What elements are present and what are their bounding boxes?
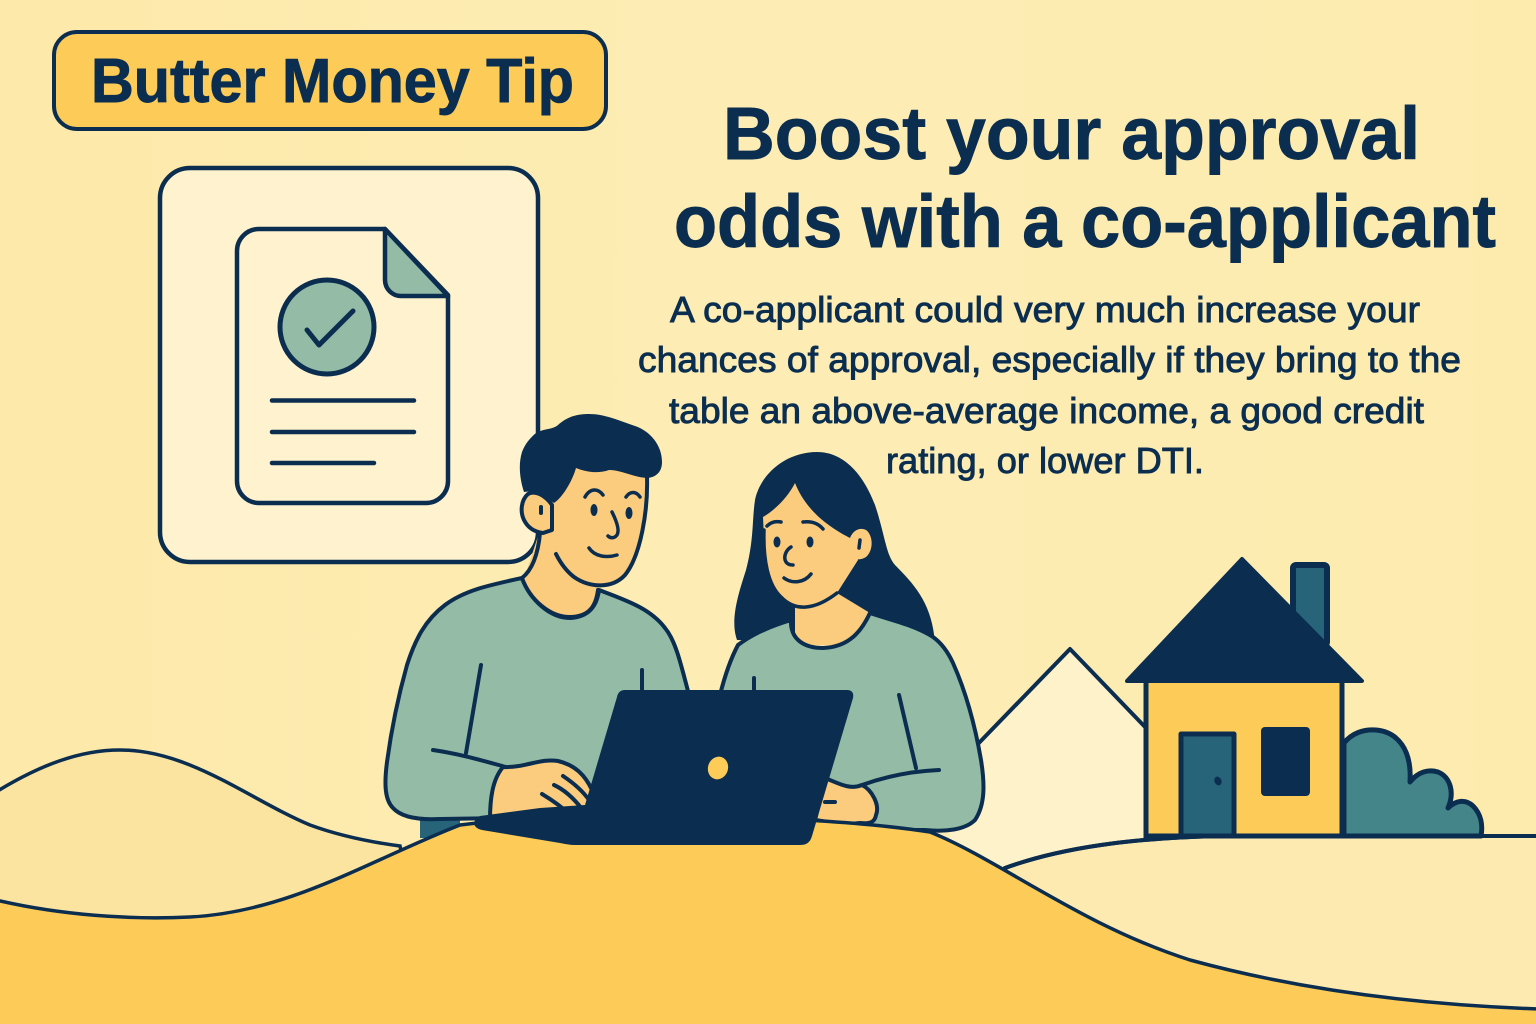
body text: table an above-average income, a good credit xyxy=(669,390,1424,431)
roof xyxy=(1127,559,1362,681)
document card xyxy=(160,168,538,562)
laptop xyxy=(474,690,853,845)
chimney xyxy=(1293,565,1327,645)
stool xyxy=(420,814,460,838)
man hair xyxy=(520,414,662,503)
woman face lines xyxy=(764,522,837,607)
title xyxy=(674,92,1496,263)
door knob xyxy=(1213,775,1223,787)
body text xyxy=(638,289,1461,481)
text lines xyxy=(272,400,414,463)
house wall xyxy=(1146,680,1342,836)
front hill xyxy=(0,816,1536,1024)
man face details xyxy=(585,490,640,557)
man sleeve lines xyxy=(433,665,642,767)
laptop logo xyxy=(705,754,731,782)
man sweater xyxy=(385,578,689,819)
man xyxy=(385,414,689,838)
right hill xyxy=(1005,836,1536,1024)
woman xyxy=(720,452,983,831)
man neck xyxy=(524,530,601,617)
woman ear xyxy=(850,529,872,559)
badge: Butter Money Tip: Butter Money Tip xyxy=(91,47,574,116)
woman neck xyxy=(795,593,870,645)
woman sweater xyxy=(720,613,983,831)
back hill left xyxy=(0,750,420,930)
bush xyxy=(1344,730,1482,836)
man face xyxy=(540,455,647,585)
background house silhouette xyxy=(950,649,1148,890)
check badge xyxy=(280,280,374,374)
title: odds with a co-applicant xyxy=(674,180,1496,263)
title: Boost your approval xyxy=(723,92,1420,175)
body text: A co-applicant could very much increase your xyxy=(670,289,1420,330)
house xyxy=(1127,559,1482,836)
woman hair xyxy=(734,452,935,645)
woman face xyxy=(763,483,858,607)
woman hand xyxy=(815,778,877,824)
door xyxy=(1181,734,1234,836)
woman sleeve lines xyxy=(754,678,939,785)
body text: rating, or lower DTI. xyxy=(886,440,1204,481)
document icon xyxy=(237,229,448,503)
badge: Butter Money Tip xyxy=(54,32,606,129)
body text: chances of approval, especially if they bring to the xyxy=(638,339,1461,380)
ground line xyxy=(1005,836,1536,868)
folded corner xyxy=(385,229,448,296)
man hand xyxy=(490,760,592,820)
window xyxy=(1261,727,1310,796)
man ear xyxy=(522,493,552,533)
